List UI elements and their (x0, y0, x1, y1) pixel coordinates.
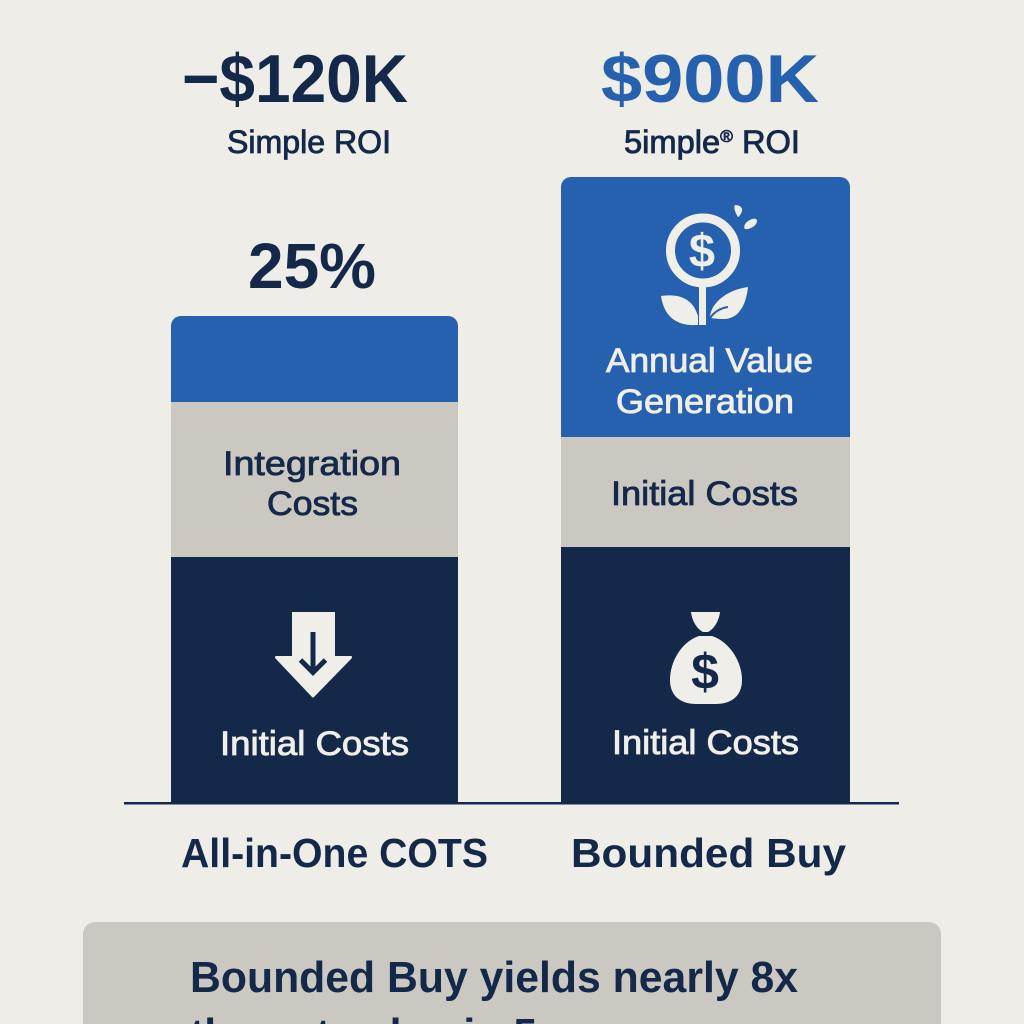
label: initial costs bottom: Initial Costs (612, 724, 799, 762)
callout line 1: Bounded Buy yields nearly 8x (190, 953, 799, 1002)
left percentage: 25% (248, 230, 376, 302)
label: initial costs: Initial Costs (220, 725, 409, 763)
category label: Bounded Buy: Bounded Buy (571, 830, 846, 876)
label: generation: Generation (616, 383, 794, 421)
segment: integration costs (171, 402, 458, 557)
icon: money plant: $ (689, 224, 715, 277)
label: annual value: Annual Value (606, 342, 813, 380)
bar: All-in-One COTS (171, 316, 458, 803)
segment: initial costs dark (561, 547, 850, 803)
bar: Bounded Buy (561, 177, 850, 803)
segment: initial costs light (561, 437, 850, 547)
right ROI label: ® (720, 127, 733, 146)
right ROI label: ROI (733, 124, 800, 160)
segment: initial costs (171, 557, 458, 803)
category label: All-in-One COTS: All-in-One COTS (181, 830, 488, 876)
callout panel (83, 922, 941, 1024)
segment: blue top (171, 316, 458, 402)
label: initial costs middle: Initial Costs (611, 475, 798, 513)
right ROI value: $900K (601, 41, 819, 117)
right ROI label: 5imple (624, 124, 718, 160)
label: integration: Integration (223, 445, 401, 483)
icon: down arrow (275, 612, 352, 698)
icon: money bag (670, 612, 742, 704)
icon: money bag: $ (691, 644, 719, 700)
left ROI value: −$120K (182, 41, 408, 117)
left ROI label: Simple ROI (227, 124, 391, 160)
baseline axis (124, 802, 899, 804)
icon: money plant (661, 205, 757, 325)
label: costs: Costs (267, 485, 358, 523)
segment: annual value (561, 177, 850, 437)
